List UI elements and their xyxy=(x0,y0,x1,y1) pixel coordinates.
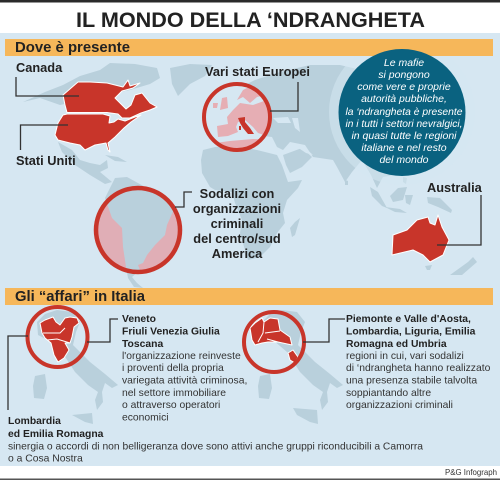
Sodalizi label xyxy=(175,186,281,261)
Veneto text block: economici xyxy=(122,412,169,424)
Piemonte text block: soppiantando altre xyxy=(346,388,431,399)
Stati Uniti label: Stati Uniti xyxy=(16,153,76,168)
Lombardia text block: sinergia o accordi di non belligeranza dove sono attivi anche gruppi riconducibili a Camorra xyxy=(8,442,423,452)
Piemonte text block: Piemonte e Valle d'Aosta, xyxy=(346,314,471,325)
Veneto text block: Friuli Venezia Giulia xyxy=(122,326,220,338)
Sodalizi label: America xyxy=(212,246,263,261)
Veneto text block: nel settore immobiliare xyxy=(122,388,226,399)
callout circle: la ‘ndrangheta è presente xyxy=(346,106,463,118)
callout circle: Le mafie xyxy=(384,57,424,69)
Vari stati Europei label xyxy=(205,64,310,111)
Italy map left xyxy=(33,310,118,424)
Piemonte text block xyxy=(303,314,491,411)
callout circle: come vere e proprie xyxy=(357,81,451,93)
Sodalizi label: organizzazioni xyxy=(193,201,281,216)
Sodalizi label: Sodalizi con xyxy=(200,186,275,201)
Lombardia text block: ed Emilia Romagna xyxy=(8,429,104,440)
Piemonte text block: una presenza stabile talvolta xyxy=(346,376,477,386)
credit: P&G Infograph xyxy=(445,467,497,477)
Veneto text block: o attraverso operatori xyxy=(122,400,220,411)
Australia in red xyxy=(392,215,449,262)
inland seas xyxy=(273,117,313,155)
callout circle: si pongono xyxy=(378,69,430,81)
callout circle: del mondo xyxy=(379,154,429,166)
Veneto text block xyxy=(87,314,247,424)
Piemonte text block: regioni in cui, vari sodalizi xyxy=(346,351,464,362)
Veneto text block: i proventi della propria xyxy=(122,363,224,374)
Piemonte text block: Romagna ed Umbria xyxy=(346,339,447,350)
Veneto text block: Veneto xyxy=(122,314,156,325)
Italy circle left with red regions xyxy=(28,307,88,367)
Piemonte text block: Lombardia, Liguria, Emilia xyxy=(346,326,476,338)
Piemonte text block: di ‘ndrangheta hanno realizzato xyxy=(346,363,491,374)
Canada label xyxy=(16,60,79,96)
section header: Gli affari in Italia: Gli “affari” in Italia xyxy=(15,288,146,305)
Sodalizi label: criminali xyxy=(211,216,263,231)
callout circle: in i tutti i settori nevralgici, xyxy=(346,118,462,130)
Australia label: Australia xyxy=(427,180,483,195)
South America circle xyxy=(94,186,182,274)
Veneto text block: Toscana xyxy=(122,339,163,350)
North America in red xyxy=(55,80,157,152)
callout circle: autorità pubbliche, xyxy=(361,93,447,105)
Canada label: Canada xyxy=(16,60,63,75)
Lombardia text block: Lombardia xyxy=(8,416,61,427)
Italy map right xyxy=(258,310,343,424)
callout halo xyxy=(329,39,475,185)
Piemonte text block: organizzazioni criminali xyxy=(346,400,453,411)
section header: Gli affari in Italia xyxy=(5,288,493,305)
top bar xyxy=(0,0,500,2)
section header: Dove è presente: Dove è presente xyxy=(15,39,130,56)
Europe circle xyxy=(204,82,275,155)
Stati Uniti label xyxy=(16,125,76,168)
Australia label xyxy=(427,180,483,245)
Lombardia text block xyxy=(8,336,423,464)
Vari stati Europei label: Vari stati Europei xyxy=(205,64,310,79)
Veneto text block: variegata attività criminosa, xyxy=(122,376,247,386)
world map xyxy=(23,63,477,288)
callout circle: italiane e nel resto xyxy=(361,142,447,154)
Lombardia text block: o a Cosa Nostra xyxy=(8,454,83,464)
title: IL MONDO DELLA ‘NDRANGHETA xyxy=(76,8,425,32)
callout circle xyxy=(338,49,466,176)
callout circle: in quasi tutte le regioni xyxy=(351,130,457,142)
section header: Dove è presente xyxy=(5,39,493,56)
Italy circle right with red regions xyxy=(244,312,304,372)
Sodalizi label: del centro/sud xyxy=(193,231,281,246)
Veneto text block: l'organizzazione reinveste xyxy=(122,351,241,362)
bottom rule xyxy=(0,478,500,480)
